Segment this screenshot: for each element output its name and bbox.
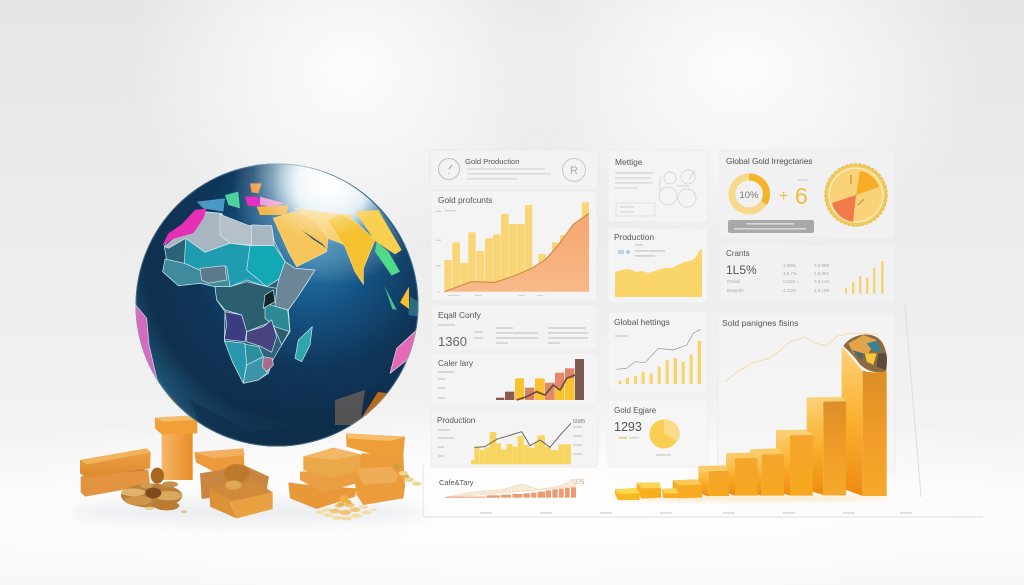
donut chart: 10% — [739, 190, 759, 201]
right pink continent — [390, 330, 417, 373]
bar 4 — [673, 479, 702, 498]
plus six value: 6 — [795, 183, 808, 209]
description text — [615, 172, 653, 213]
panel: mettige — [608, 150, 708, 222]
panel: global gold inventories — [720, 150, 895, 238]
small values: 1.09% — [783, 263, 796, 268]
big number: 1360 — [438, 334, 467, 349]
panel: equal county — [431, 305, 597, 350]
small values — [727, 263, 830, 293]
small values: Desyrd0 — [727, 288, 744, 293]
caption — [656, 454, 671, 456]
Borneo — [400, 287, 409, 309]
plus six value — [779, 179, 808, 209]
bar 7 — [750, 448, 784, 496]
description text — [467, 168, 551, 180]
Madagascar — [295, 327, 312, 362]
small values: 1.8.109 — [814, 288, 830, 293]
panel: cafe and tary chart — [439, 478, 585, 498]
ocean glare — [236, 164, 404, 282]
mini globe on tallest bar — [844, 334, 887, 372]
Africa silhouette — [163, 212, 315, 383]
Angola — [224, 312, 247, 342]
panel: gold egjare — [608, 400, 708, 467]
SE Asia — [375, 242, 400, 276]
map of land masses — [134, 183, 418, 383]
donut chart — [732, 177, 767, 211]
value label: 5085 — [573, 419, 585, 425]
bar chart — [436, 202, 589, 296]
heading: Global hettings — [614, 317, 670, 327]
small text lines — [438, 324, 588, 344]
bar 8 — [776, 430, 813, 496]
heading: Mettige — [615, 157, 643, 167]
icon: gauge — [438, 158, 460, 180]
gold bars centre — [194, 448, 273, 518]
panel: production line and bars — [431, 410, 598, 467]
panel: caler lary — [431, 353, 598, 406]
Sumatra — [384, 286, 397, 310]
gold flakes — [315, 464, 421, 520]
small values: 7.5.998 — [814, 263, 830, 268]
floor shadow — [70, 500, 430, 524]
icon: gears sketch — [659, 170, 696, 207]
big percent: 1L5% — [726, 263, 757, 277]
eastern Europe — [245, 197, 261, 207]
heading: Cafe&Tary — [439, 478, 474, 487]
icon: circled figure — [562, 158, 586, 182]
globe — [133, 163, 420, 450]
heading: Gold Egjare — [614, 406, 657, 415]
glare — [256, 164, 376, 237]
heading: Gold profcunts — [438, 195, 492, 205]
Morocco — [162, 208, 207, 246]
panel: global hettings — [608, 312, 708, 392]
left pink continent — [134, 303, 158, 382]
small values: Ovnall — [727, 279, 740, 284]
heading: Global Gold Irregctaries — [726, 157, 812, 166]
small values: 4.13% — [783, 288, 796, 293]
pie chart — [650, 419, 680, 448]
bar 10 tallest — [842, 347, 887, 496]
gold medallion pie — [825, 164, 887, 226]
bar 2 — [637, 482, 661, 499]
Zambia region — [247, 320, 277, 352]
heading: Sold panignes fisins — [722, 318, 798, 328]
panel: sold panignes — [718, 312, 895, 472]
north-central Africa teal band — [184, 238, 285, 287]
bar 1 — [615, 488, 640, 500]
panel: crants — [720, 244, 895, 303]
bar 6 — [726, 453, 757, 496]
line chart — [725, 333, 878, 382]
north Africa — [165, 212, 274, 252]
small text lines — [438, 371, 454, 399]
area bar chart — [445, 480, 576, 498]
small values: 1.8.394 — [814, 271, 830, 276]
bar 5 — [698, 465, 729, 497]
gold bar stack left — [80, 448, 151, 497]
lower reflection — [167, 392, 374, 446]
bar and line chart — [471, 423, 571, 464]
heading: Production — [437, 416, 475, 425]
panel: gold production — [430, 150, 598, 190]
rising 3D gold bar chart — [610, 333, 890, 502]
west Africa — [163, 259, 230, 287]
axis tick labels — [480, 512, 912, 514]
panel: gold products chart — [431, 191, 597, 301]
small values: Ca1t0 ÷ — [783, 279, 799, 284]
area bars — [615, 249, 702, 297]
small text — [615, 335, 628, 337]
gold bars and nuggets — [80, 416, 421, 520]
dashboard frame lines — [423, 305, 983, 517]
line and bar chart — [617, 329, 701, 384]
heading: Eqall Confy — [438, 310, 482, 320]
small values: 7.8.149 — [814, 279, 830, 284]
panel: production area — [608, 228, 708, 303]
southern Africa — [224, 341, 247, 383]
Uganda marker — [263, 290, 275, 308]
caption — [619, 437, 639, 438]
heading: Production — [614, 232, 654, 242]
heading: Caler lary — [438, 359, 474, 368]
heading: Gold Production — [465, 157, 519, 166]
legend — [618, 244, 665, 257]
East Asia — [355, 210, 402, 254]
India — [327, 214, 375, 284]
central Africa — [215, 282, 290, 345]
small values: 4.8.7% — [783, 271, 797, 276]
legend box — [616, 203, 655, 216]
bar 3 — [662, 488, 679, 498]
Iran to Central Asia — [295, 208, 352, 245]
gold column — [155, 416, 197, 480]
heading: Crants — [726, 249, 750, 258]
big number: 1293 — [614, 420, 642, 434]
mini bars — [845, 261, 884, 294]
bar 9 — [807, 397, 846, 495]
combo chart — [496, 359, 584, 400]
legend lines — [438, 426, 582, 457]
western Europe — [197, 198, 225, 212]
gold coins pile left — [121, 468, 187, 513]
plus six value: + — [779, 188, 788, 205]
icon: circled figure: R — [570, 165, 578, 177]
gold bars stack right — [288, 433, 405, 509]
Arabia — [273, 212, 328, 267]
Turkey — [257, 205, 288, 215]
Philippines area — [408, 297, 418, 317]
value label: 5375 — [571, 480, 585, 486]
grey caption box — [728, 220, 814, 233]
horn of Africa — [275, 262, 315, 310]
